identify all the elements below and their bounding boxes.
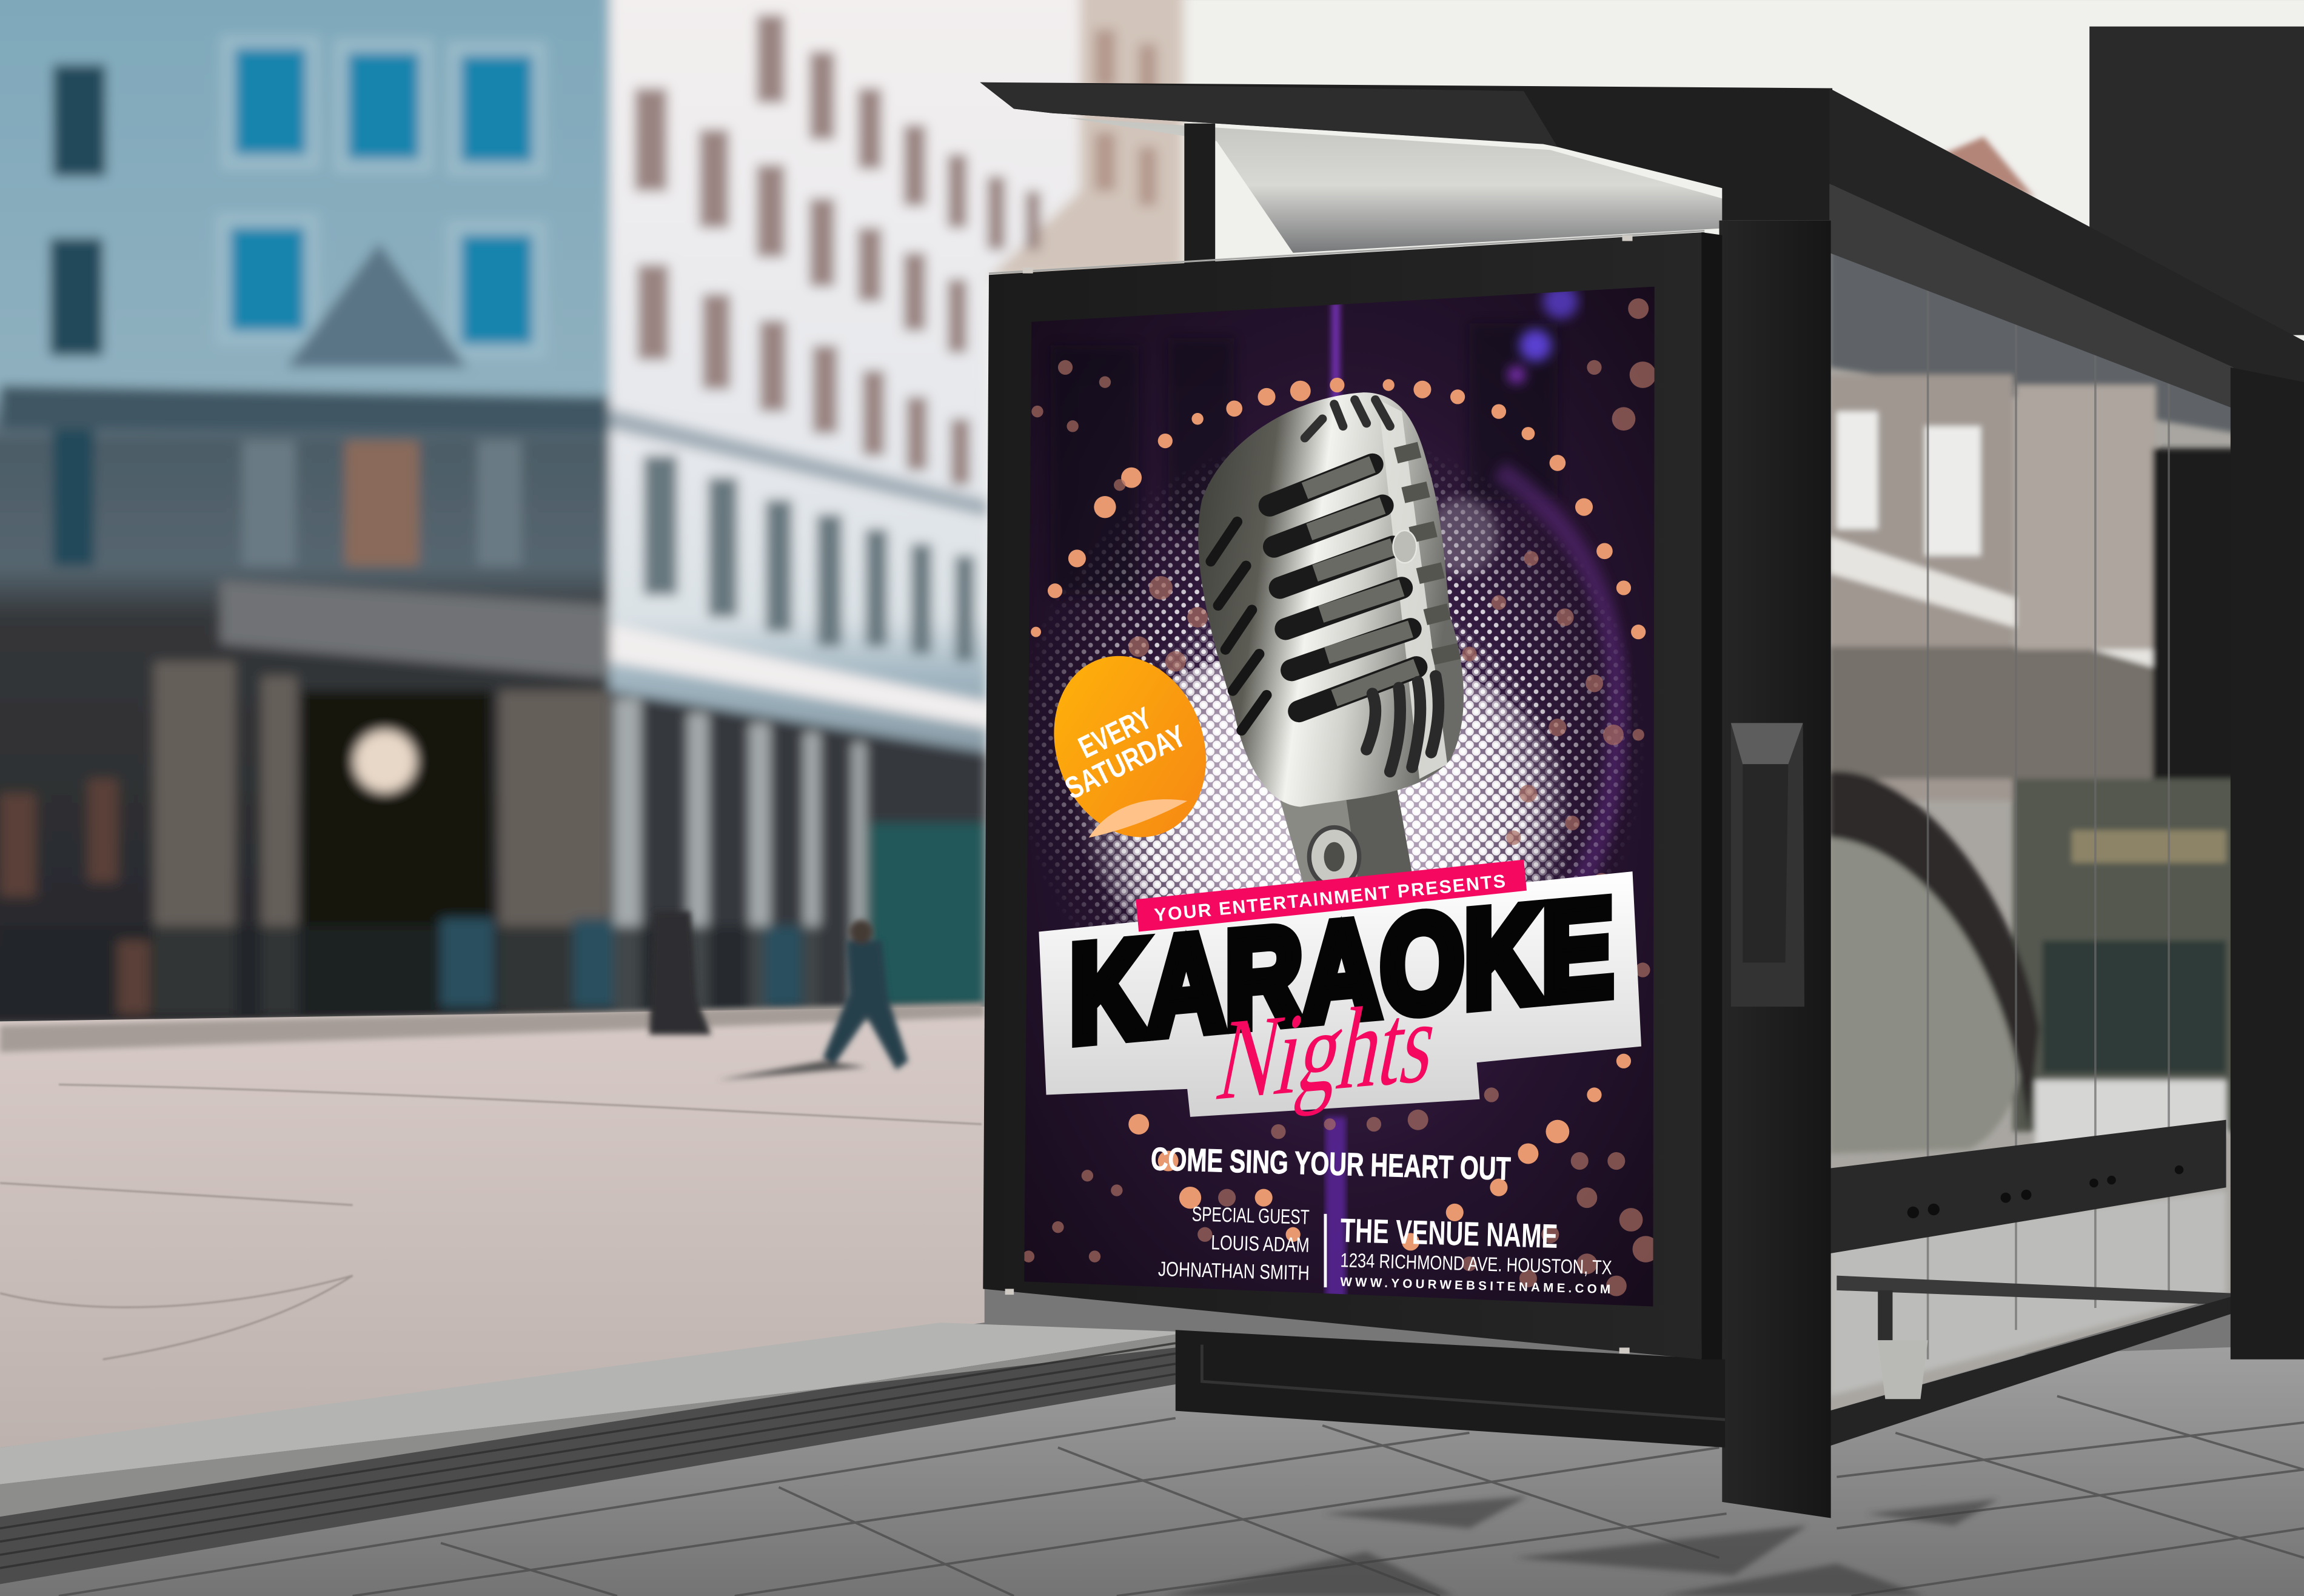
portico [221,580,617,679]
venue address: 1234 RICHMOND AVE. HOUSTON, TX [1340,1249,1612,1279]
mic badge [1393,531,1416,563]
handle body [1731,723,1804,1007]
far kerb [0,1002,985,1052]
pedestrian head [849,920,873,944]
sidewalk tiles [0,1345,2304,1596]
handle inner [1743,764,1788,962]
reflected crowd [2043,941,2226,1073]
roof frame [980,82,1832,221]
background dark panels [1051,323,1558,595]
sticker peel [1089,799,1187,837]
sky background [0,0,2304,1028]
venue name: THE VENUE NAME [1340,1212,1558,1255]
bottom glass rail [1829,1281,2285,1446]
right grille slots [1396,450,1459,657]
dim bokeh dots [1023,298,1659,1296]
every: EVERY [1073,700,1157,765]
statues [243,441,521,566]
vertical divider [1324,1214,1327,1287]
pedestrian [717,920,908,1080]
glass side panel [1831,253,2231,1446]
reflected building [1829,375,2013,801]
building lintel [0,385,610,434]
tile seams [59,1396,2304,1596]
reflected dark block [2152,448,2241,786]
ledge [610,409,988,517]
arcade columns [614,698,865,1014]
saturday: SATURDAY [1060,718,1191,806]
frame edge [1701,232,1722,1360]
right halftone highlight [1427,498,1498,575]
tagline: COME SING YOUR HEART OUT [1150,1141,1511,1187]
main post [1719,221,1831,1518]
rear post [2231,367,2304,1360]
far building windows [1094,30,1156,206]
base inset line [1202,1345,1725,1420]
purple light beam [1325,301,1346,1308]
purple flare [1507,284,1578,384]
sticker [1030,634,1231,859]
pediment [287,243,467,367]
reflected awning [2072,830,2226,863]
white glow [1073,646,1572,970]
roof top edge highlight [980,82,1558,147]
crowd warm [0,779,150,1014]
reflected white beam [1829,537,2163,670]
grille mesh highlights [1305,464,1416,698]
reflected mid building [2016,385,2155,649]
ground floor arcade [610,691,988,1014]
reflected person hair [1829,771,2040,1132]
purple swirl [1469,471,1617,1014]
teal shop front [867,823,985,1007]
mount ring [1309,827,1359,886]
frame clips [1005,235,1632,1353]
crowd colours [441,919,802,1007]
bench leg [1878,1290,1892,1340]
right wing facade [610,0,1080,1028]
poster artwork [1014,280,1675,1323]
left building window surrounds [216,35,547,358]
right wing lower windows [643,455,974,662]
kerb stripe [0,1323,1176,1484]
mic head [1198,392,1464,807]
website: WWW.YOURWEBSITENAME.COM [1340,1275,1610,1296]
poster frame [983,231,1722,1360]
door light [354,731,416,792]
mount [1309,782,1413,888]
pavement cracks [0,1085,982,1360]
mic neck [1278,786,1413,899]
handle top [1731,723,1803,764]
second pedestrian [649,911,711,1034]
rail bolts [1907,1165,2183,1218]
halftone disc [1014,294,1675,1323]
glass mullions [1928,280,2169,1360]
left building windows [230,49,532,344]
ribbon text: YOUR ENTERTAINMENT PRESENTS [1153,871,1506,926]
reflected ground [1829,1190,2226,1396]
reflected windows [1837,412,1984,767]
reflected floor [2035,1080,2226,1153]
dense halftone [1014,294,1675,1323]
poster background [1014,280,1675,1323]
sticker disc [1030,634,1231,859]
reflection backdrop [1829,221,2285,1411]
roof right beam [1829,88,2304,409]
guest two: JOHNATHAN SMITH [1158,1258,1310,1285]
poster base [1176,1330,1725,1447]
nights script: Nights [1208,977,1448,1125]
orange dot ring [1031,378,1646,1250]
sticker text [1060,700,1191,806]
rail [1829,1120,2226,1253]
pedestrian body [823,941,908,1070]
blurred street backdrop [0,0,1183,1028]
far building [988,0,1183,280]
reflected person [1829,836,2024,1153]
roof inner beam [1829,184,2234,409]
far pink roof [1932,136,2035,198]
left sidewalk band [0,1335,1176,1517]
bottom vertical slots [1367,676,1439,771]
frame top highlight [989,231,1704,273]
reflected street [2013,779,2285,1132]
mic grille slots [1270,464,1416,711]
mic spine [1378,400,1447,779]
statue niche [346,441,419,566]
guest one: LOUIS ADAM [1211,1231,1310,1257]
wet patches [1161,1496,1998,1596]
top slots [1305,400,1390,438]
karaoke heading: KARAOKE [1070,870,1613,1071]
small post [1184,124,1215,270]
handle box [1731,723,1804,1007]
left grille slots [1211,521,1267,731]
grate slats [0,1343,1176,1568]
drainage grate [0,1335,1176,1584]
rear dark building block [2089,27,2304,335]
reflected storefront [1829,646,2152,779]
street people [0,926,823,1014]
band [610,625,988,728]
microphone [1198,392,1464,899]
guest heading: SPECIAL GUEST [1191,1202,1310,1229]
bench [1837,1276,2234,1305]
reflections [1831,253,2231,1396]
cup [1878,1340,1928,1399]
special guest list [1158,1202,1310,1285]
columns [154,662,614,1014]
pedestrian shadow [717,1061,867,1080]
pavement [0,1007,985,1447]
left building [0,0,625,1028]
mount dark collar [1344,782,1413,888]
pink ribbon [1136,860,1527,932]
doorway [301,691,492,1014]
right wing windows [635,15,1040,485]
roof glass [1067,118,1731,253]
white banner [1039,871,1641,1117]
left building dark windows [50,65,105,566]
mount inner [1324,842,1344,871]
frame body [983,232,1704,1360]
upper glass tint [1831,253,2231,435]
